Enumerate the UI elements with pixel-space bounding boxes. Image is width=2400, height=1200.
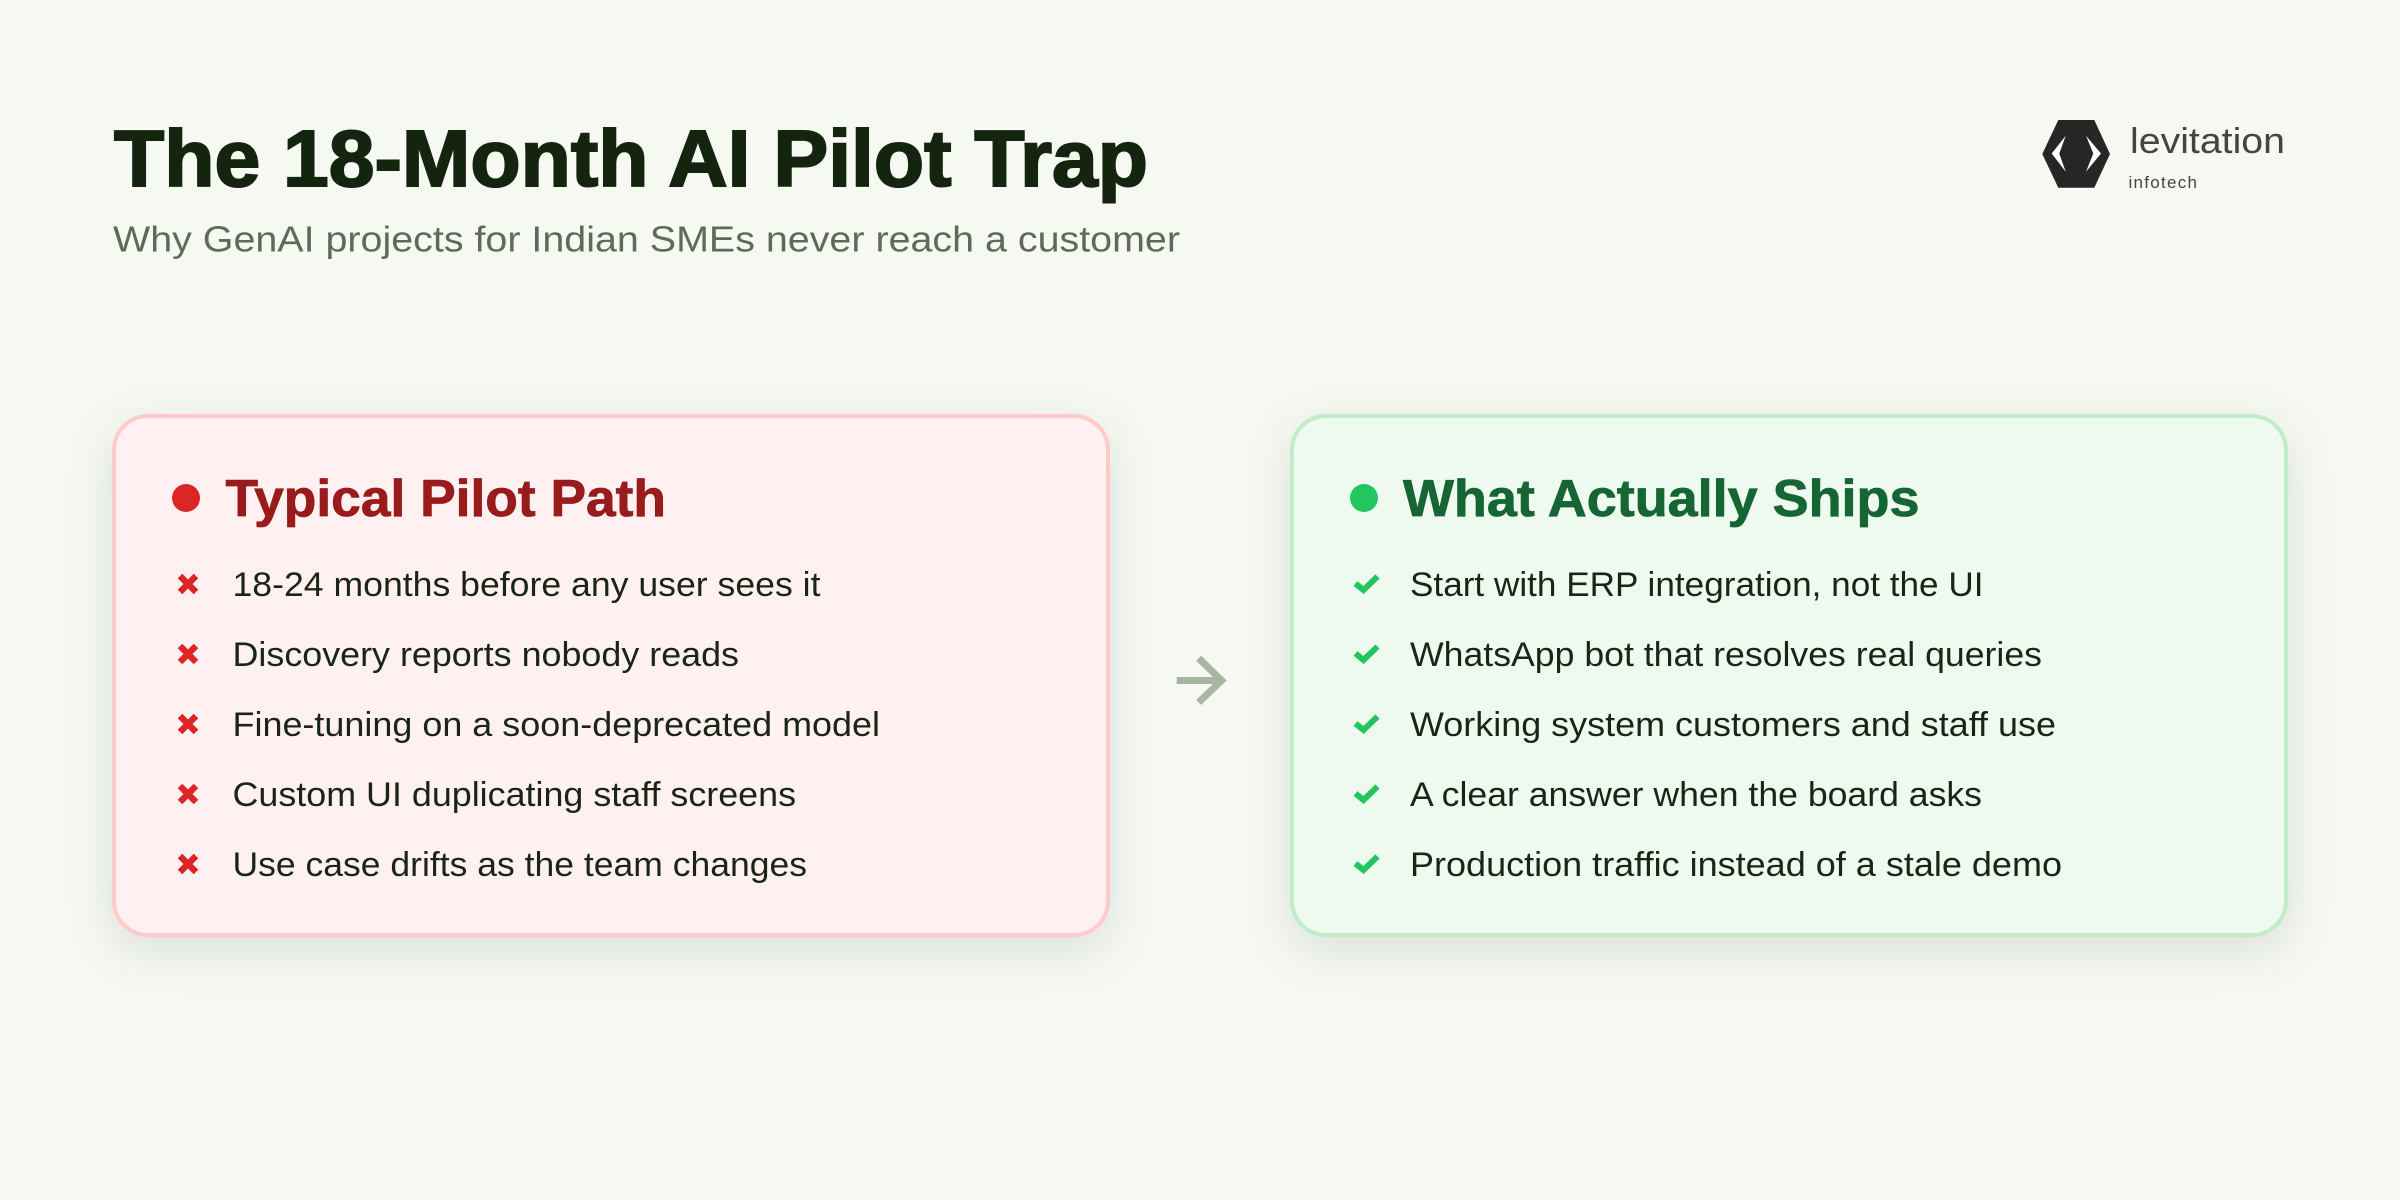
list item 4: A clear answer when the board asks: [1410, 776, 1982, 814]
list item 1: 18-24 months before any user sees it: [232, 566, 821, 604]
list item 4: Custom UI duplicating staff screens: [232, 776, 796, 814]
icon: red status dot: [172, 484, 200, 512]
logo subtext: infotech: [2128, 173, 2197, 192]
list item 5: Use case drifts as the team changes: [232, 846, 807, 884]
panel: what actually ships: [1292, 416, 2286, 935]
logo: levitation infotech: [2042, 120, 2285, 192]
heading: typical pilot path: Typical Pilot Path: [226, 470, 666, 528]
arrow: [1177, 658, 1222, 702]
icon: green status dot: [1350, 484, 1378, 512]
list item 5: Production traffic instead of a stale demo: [1410, 846, 2062, 884]
logo wordmark: levitation: [2130, 120, 2285, 161]
list item 2: Discovery reports nobody reads: [232, 636, 739, 674]
icon: hexagon logo mark: [2042, 120, 2110, 188]
list item 3: Working system customers and staff use: [1410, 706, 2056, 744]
list item 1: Start with ERP integration, not the UI: [1410, 566, 1984, 604]
panel: typical pilot path: [114, 416, 1108, 935]
title: The 18-Month AI Pilot Trap: [114, 114, 1148, 203]
heading: what actually ships: What Actually Ships: [1403, 470, 1920, 528]
list item 2: WhatsApp bot that resolves real queries: [1410, 636, 2042, 674]
subtitle: Why GenAI projects for Indian SMEs never reach a customer: [113, 218, 1180, 260]
list item 3: Fine-tuning on a soon-deprecated model: [232, 706, 880, 744]
